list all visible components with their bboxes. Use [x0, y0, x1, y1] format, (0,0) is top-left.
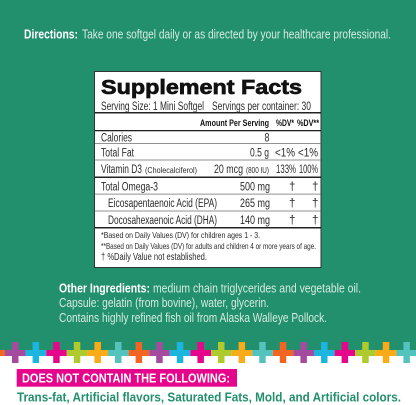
- decorative cross border: [0, 342, 416, 363]
- row: total fat: <1%: [275, 148, 295, 160]
- row: vitamin d3: Vitamin D3: [101, 164, 142, 176]
- row: vitamin d3: (800 IU): [246, 165, 269, 175]
- row: total fat: <1%: [298, 148, 318, 160]
- row: vitamin d3: 100%: [299, 164, 318, 176]
- row: total omega-3: †: [312, 182, 318, 194]
- row: epa: †: [312, 198, 318, 210]
- row: total omega-3: [101, 182, 318, 194]
- serving info: [101, 101, 311, 113]
- footnotes: *Based on Daily Values (DV) for children ages 1 - 3.: [101, 230, 260, 240]
- other ingredients text: Contains highly refined fish oil from Alaska Walleye Pollock.: [59, 310, 327, 325]
- row: dha: 140 mg: [240, 215, 270, 227]
- table header: %DV*: [276, 118, 294, 129]
- row: dha: †: [289, 215, 295, 227]
- other ingredients text: [59, 280, 361, 325]
- heading: supplement facts: Supplement Facts: [101, 76, 302, 99]
- row: vitamin d3: 20 mcg: [214, 164, 243, 176]
- row: total fat: 0.5 g: [250, 148, 269, 160]
- serving info: Servings per container: 30: [212, 101, 311, 113]
- footnotes: † %Daily Value not established.: [101, 252, 207, 263]
- footnotes: [101, 230, 316, 263]
- row: dha: †: [312, 215, 318, 227]
- other ingredients text: Other Ingredients:: [59, 280, 150, 296]
- excluded ingredients list: Trans-fat, Artificial flavors, Saturated Fats, Mold, and Artificial colors.: [17, 390, 401, 404]
- banner: does not contain: DOES NOT CONTAIN THE FOLLOWING:: [22, 370, 230, 385]
- row: epa: †: [289, 198, 295, 210]
- row: calories: Calories: [101, 132, 132, 144]
- row: vitamin d3: (Cholecalciferol): [145, 165, 197, 175]
- row: total omega-3: †: [289, 182, 295, 194]
- row: vitamin d3: 133%: [276, 164, 296, 176]
- row: total fat: [101, 148, 318, 160]
- row: vitamin d3: [101, 164, 318, 176]
- footnotes: **Based on Daily Values (DV) for adults and children 4 or more years of age.: [101, 241, 316, 251]
- directions text: Directions:: [24, 26, 78, 42]
- row: epa: 265 mg: [240, 198, 270, 210]
- serving info: Serving Size: 1 Mini Softgel: [101, 101, 204, 113]
- other ingredients text: medium chain triglycerides and vegetable oil.: [153, 280, 361, 296]
- row: epa: Eicosapentaenoic Acid (EPA): [108, 198, 217, 210]
- table header: %DV**: [297, 118, 319, 129]
- row: dha: Docosahexaenoic Acid (DHA): [108, 215, 217, 227]
- row: calories: [101, 132, 270, 144]
- row: total fat: Total Fat: [101, 148, 135, 160]
- row: total omega-3: Total Omega-3: [101, 182, 158, 194]
- panel: supplement facts: [94, 72, 321, 268]
- row: calories: 8: [264, 132, 270, 144]
- row: total omega-3: 500 mg: [240, 182, 270, 194]
- other ingredients text: Capsule: gelatin (from bovine), water, glycerin.: [59, 295, 269, 310]
- table header: Amount Per Serving: [200, 118, 269, 129]
